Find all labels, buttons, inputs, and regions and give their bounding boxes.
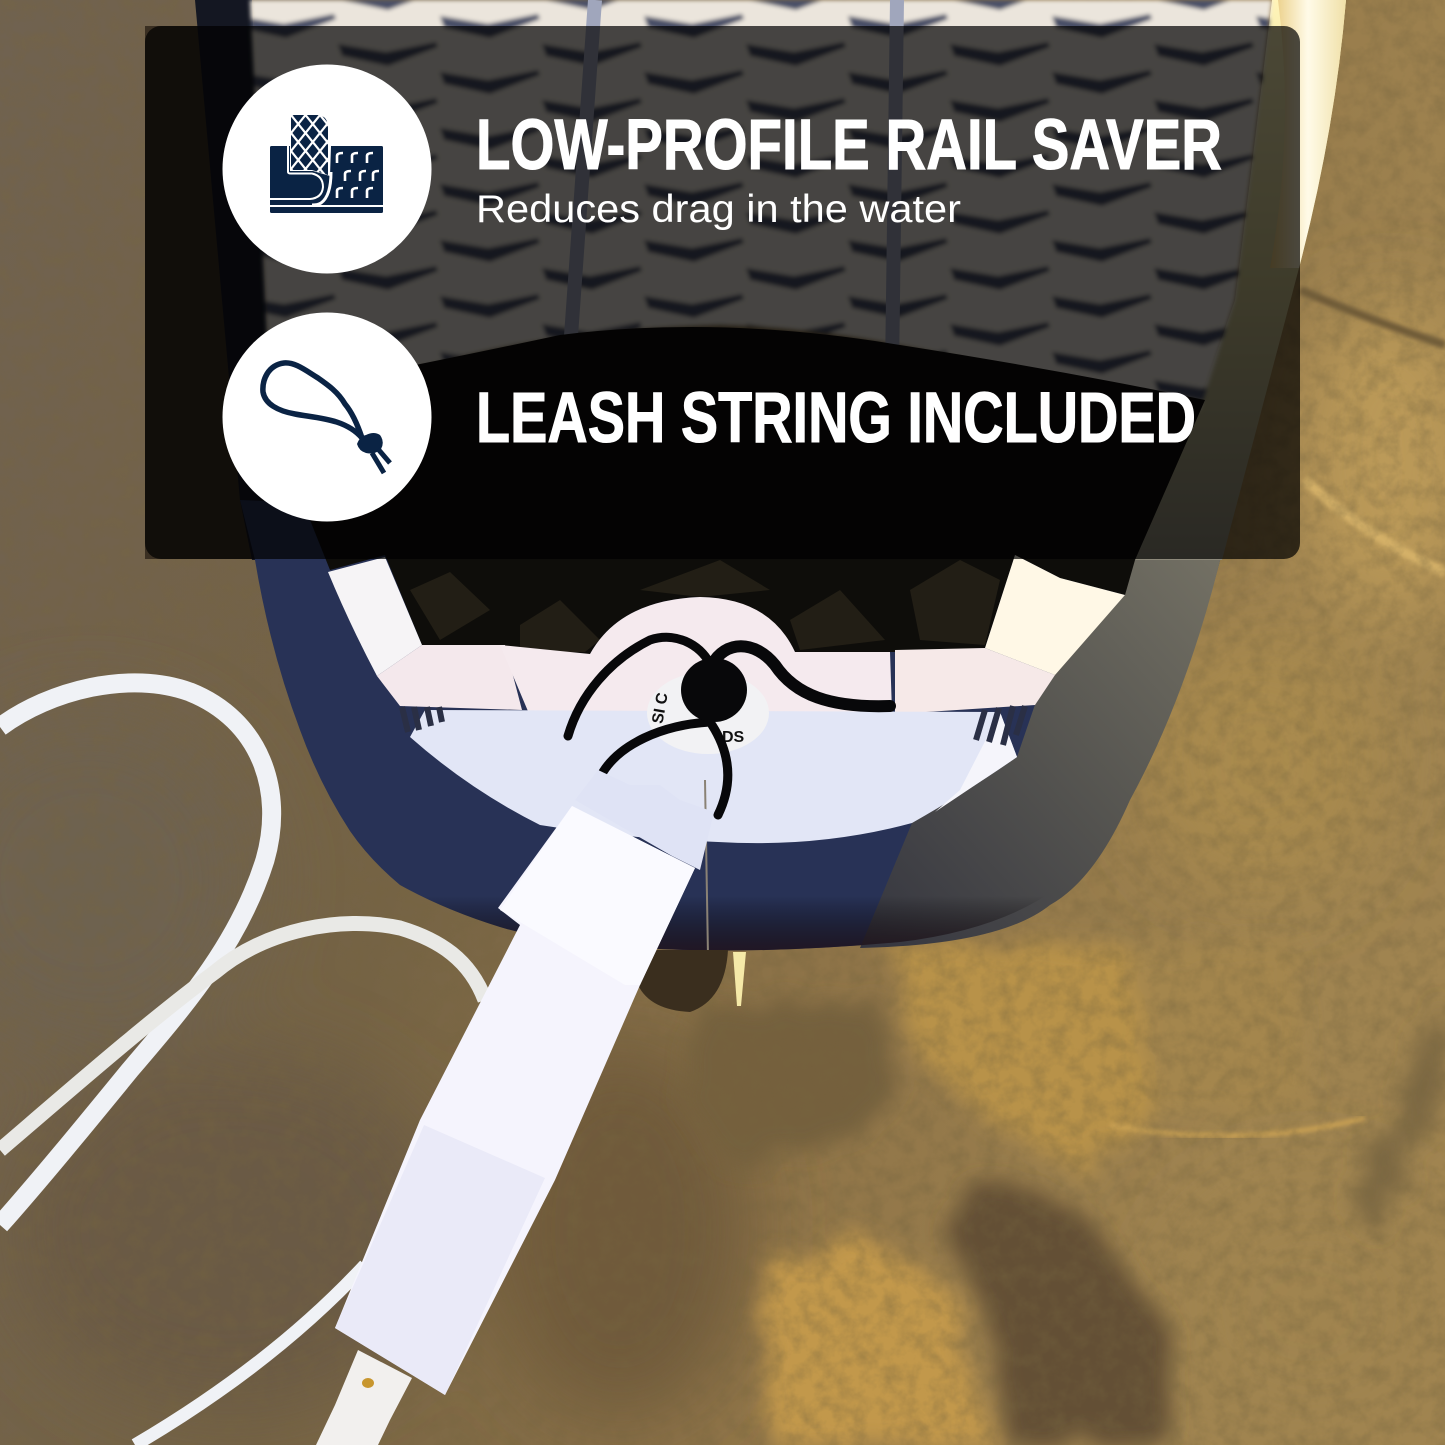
leash cuff strap bbox=[316, 770, 714, 1445]
stringer stripes bbox=[402, 706, 1025, 745]
heading: leash string included: LEASH STRING INCLUDED bbox=[476, 379, 1196, 458]
traction pad: dark section bbox=[262, 327, 1205, 654]
heading: low-profile rail saver: LOW-PROFILE RAIL SAVER bbox=[476, 106, 1222, 185]
traction pad: texture on dark section bbox=[410, 560, 1000, 652]
rail saver band bbox=[240, 500, 1225, 950]
cream deck edge bbox=[1135, 0, 1346, 560]
subheading: Reduces drag in the water bbox=[476, 188, 961, 231]
white tail block centre arch bbox=[500, 597, 892, 717]
surfboard tail: SI C bbox=[650, 691, 672, 725]
clear grey section of rail bbox=[860, 540, 1225, 948]
traction pad: light section bbox=[250, 0, 1272, 410]
white tail block right bbox=[895, 648, 1055, 714]
icon circle: rail saver bbox=[222, 64, 432, 274]
surfboard tail bbox=[195, 0, 1346, 1012]
icon: rail saver bbox=[270, 115, 383, 213]
leash cord loops bbox=[0, 683, 485, 1445]
surfboard tail: DS bbox=[722, 729, 745, 746]
logo disc bbox=[647, 672, 769, 754]
shadowed sand behind left of panel bbox=[145, 26, 270, 559]
dark left rail top bbox=[195, 0, 300, 560]
cord and knot bbox=[568, 637, 890, 815]
icon: leash string bbox=[263, 363, 390, 473]
icon circle: leash string bbox=[222, 312, 432, 522]
traction pad grooves bbox=[560, 0, 897, 520]
knot bbox=[681, 658, 747, 722]
fin below board bbox=[733, 952, 746, 1006]
dark translucent panel bbox=[145, 26, 1300, 559]
white fin area bbox=[410, 710, 1017, 843]
white tail block left bbox=[328, 557, 422, 676]
